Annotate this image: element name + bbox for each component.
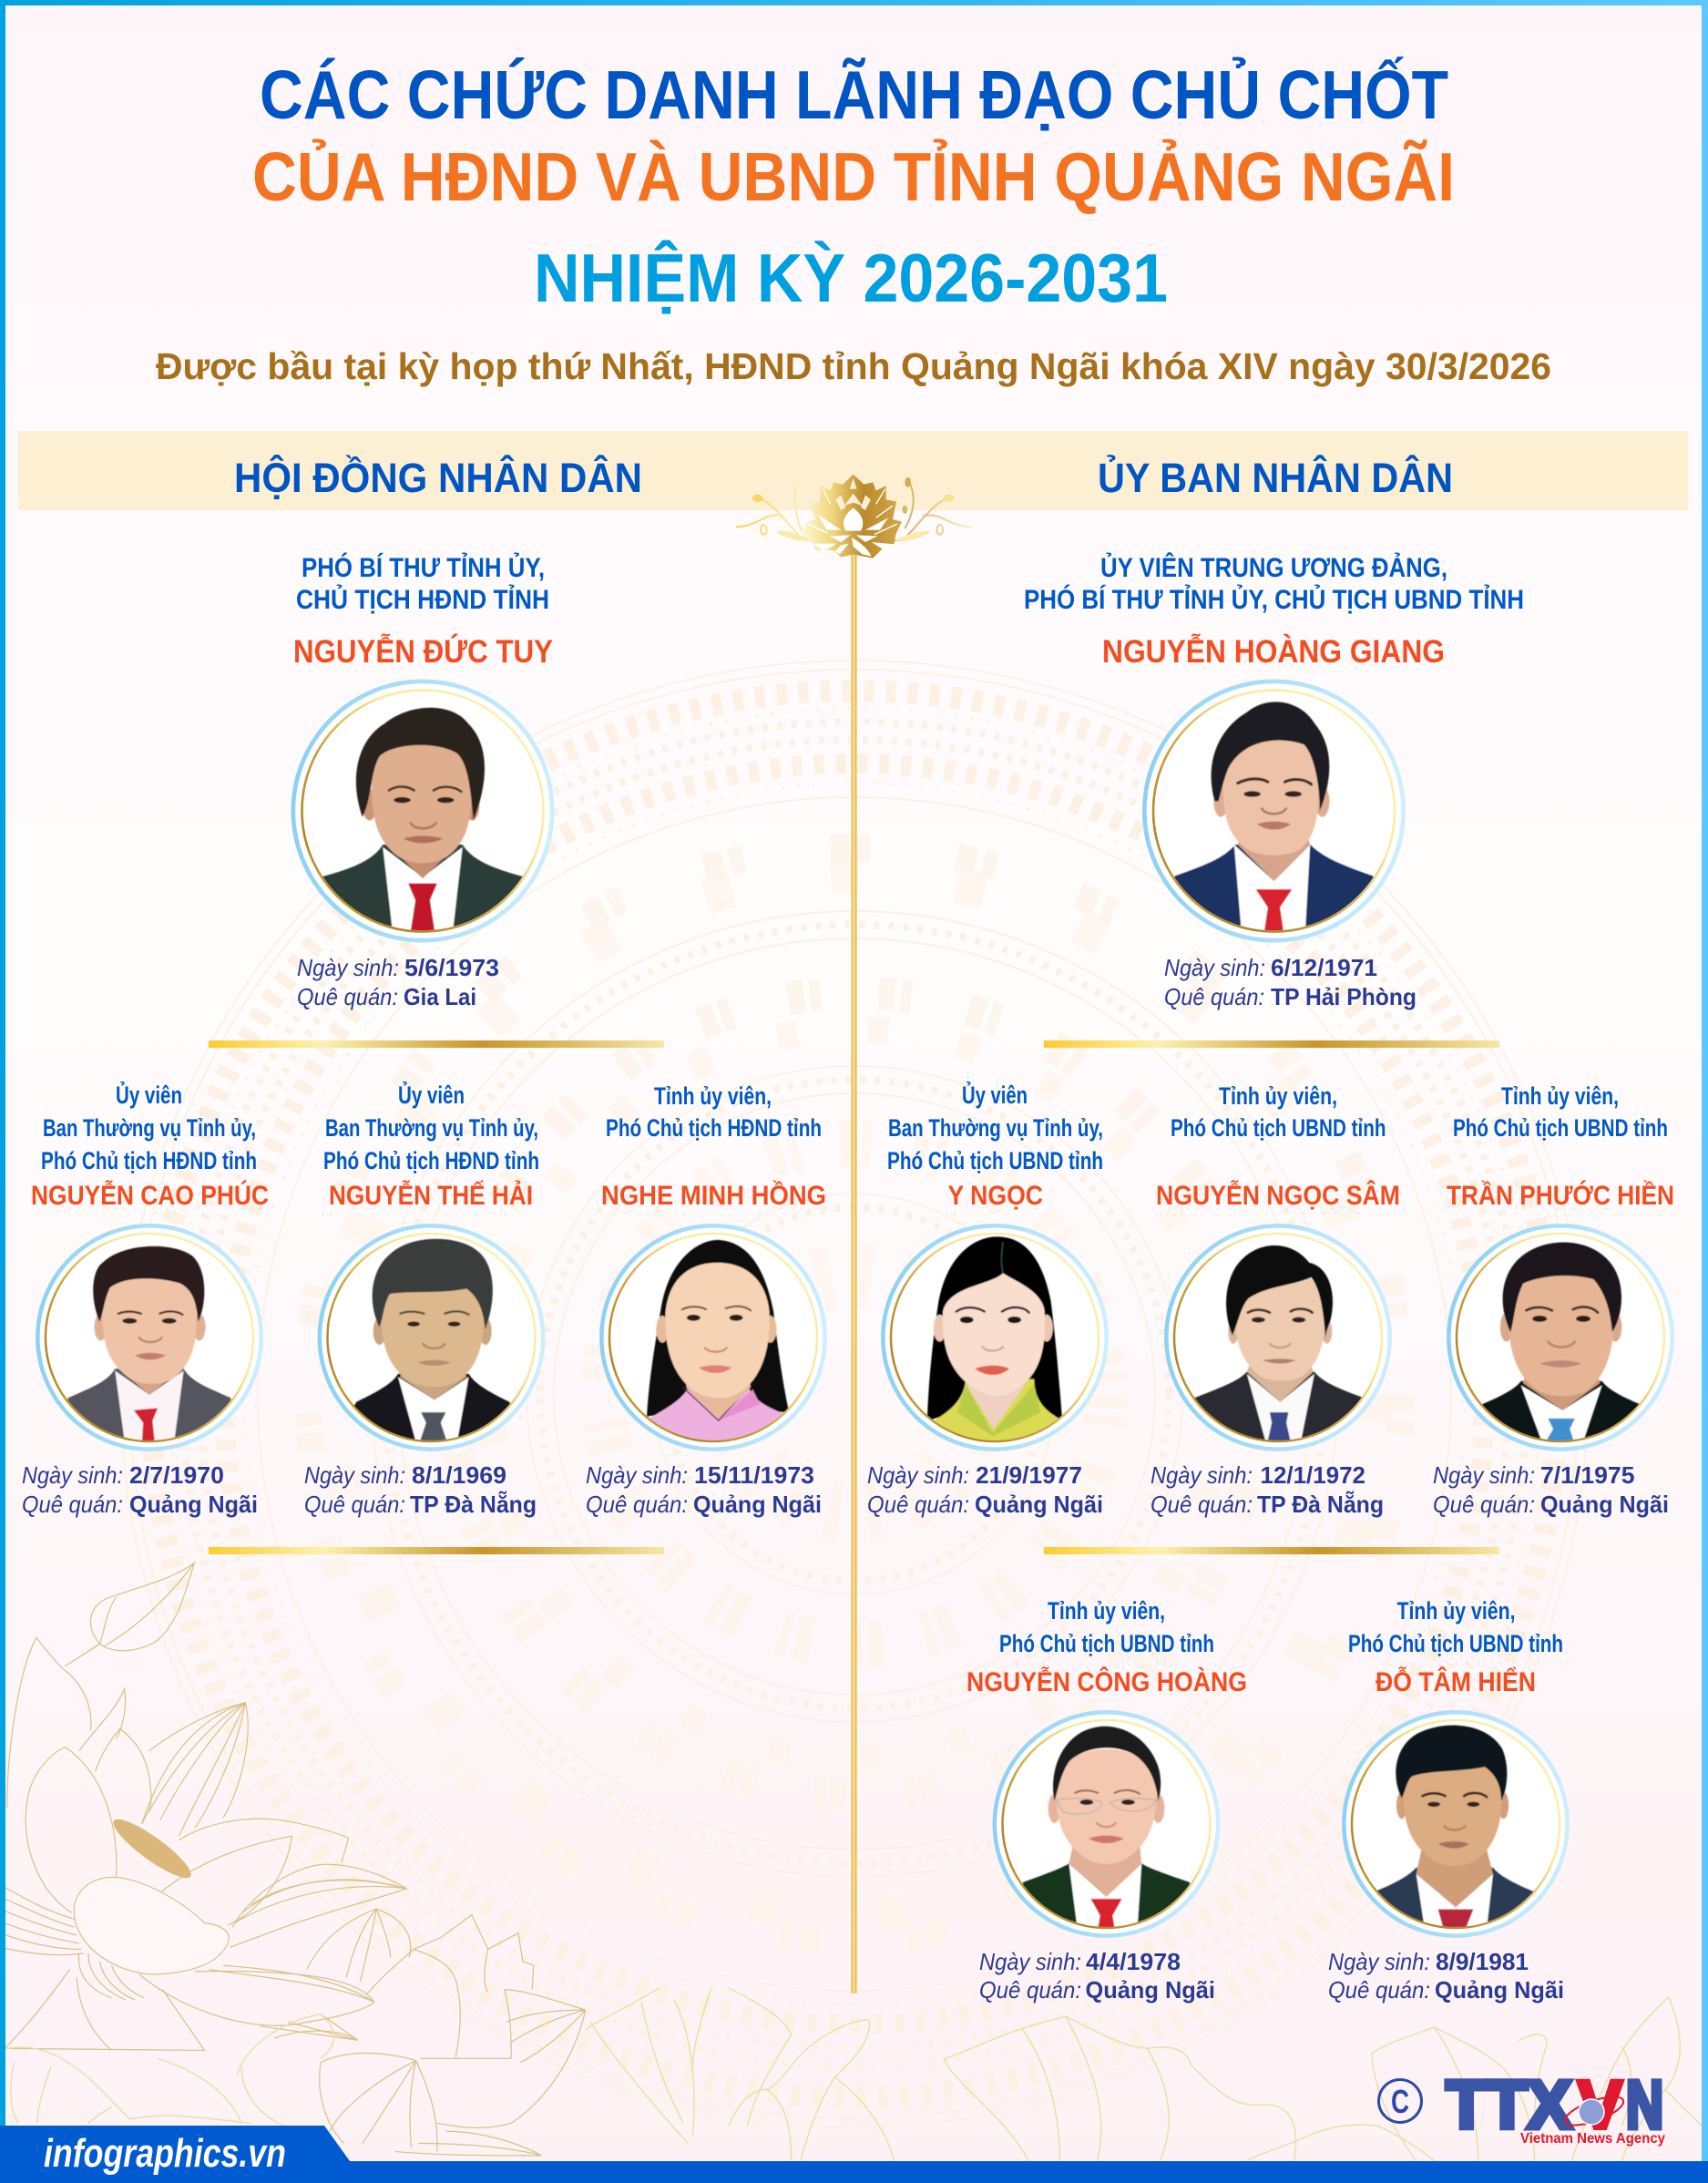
- birth date and hometown: Quê quán:: [1164, 983, 1264, 1010]
- pale lotus line art bottom: [0, 1988, 711, 2144]
- role: Tỉnh ủy viên,: [1501, 1082, 1619, 1110]
- panel: Đỗ Tâm Hiển: [1328, 1597, 1568, 2004]
- icon: copyright: C: [1391, 2083, 1409, 2120]
- role: Phó Chủ tịch UBND tỉnh: [887, 1147, 1103, 1174]
- birth date and hometown: [1151, 1461, 1384, 1518]
- lotus line art bottom left: [0, 1563, 586, 2156]
- role: Ủy viên: [962, 1080, 1028, 1109]
- birth date and hometown: Ngày sinh:: [586, 1461, 688, 1489]
- role: [606, 1082, 822, 1142]
- portrait: [1344, 1712, 1568, 1936]
- role: Tỉnh ủy viên,: [1048, 1597, 1165, 1624]
- role: Phó Chủ tịch UBND tỉnh: [1171, 1114, 1386, 1142]
- logo: TTXVN: TTX: [1447, 2066, 1572, 2143]
- portrait: [320, 1225, 543, 1450]
- role: [1024, 552, 1524, 615]
- birth date and hometown: Quảng Ngãi: [1435, 1976, 1564, 2004]
- birth date and hometown: [979, 1948, 1215, 2004]
- birth date and hometown: Quê quán:: [586, 1491, 688, 1518]
- birth date and hometown: [867, 1461, 1103, 1518]
- birth date and hometown: Ngày sinh:: [1328, 1948, 1430, 1975]
- name: NGUYỄN HOÀNG GIANG: [1102, 633, 1445, 670]
- role: Ban Thường vụ Tỉnh ủy,: [325, 1114, 538, 1142]
- role: Ban Thường vụ Tỉnh ủy,: [43, 1114, 256, 1142]
- panel: Nguyễn Thế Hải: [304, 1080, 543, 1518]
- role: Ủy viên: [116, 1080, 182, 1109]
- bronze drum watermark: [121, 661, 1588, 2127]
- birth date and hometown: [1328, 1948, 1564, 2004]
- lotus seed pod fill: [107, 1811, 197, 1886]
- birth date and hometown: Quê quán:: [867, 1491, 969, 1518]
- logo: TTXVN: [1447, 2066, 1665, 2147]
- footer bar with tab: [0, 2126, 1708, 2183]
- birth date and hometown: 4/4/1978: [1086, 1948, 1181, 1975]
- name: NGUYỄN CÔNG HOÀNG: [967, 1666, 1247, 1697]
- birth date and hometown: 21/9/1977: [976, 1461, 1082, 1489]
- role: PHÓ BÍ THƯ TỈNH ỦY, CHỦ TỊCH UBND TỈNH: [1024, 584, 1524, 615]
- birth date and hometown: 5/6/1973: [404, 954, 499, 981]
- title line 2: CỦA HĐND VÀ UBND TỈNH QUẢNG NGÃI: [252, 138, 1455, 215]
- birth date and hometown: Quê quán:: [1151, 1491, 1253, 1518]
- name: Y NGỌC: [947, 1181, 1043, 1211]
- role: [887, 1080, 1103, 1174]
- portrait: [601, 1225, 825, 1450]
- portrait: [883, 1225, 1107, 1450]
- birth date and hometown: Quảng Ngãi: [693, 1491, 822, 1518]
- role: [1453, 1082, 1668, 1142]
- panel: Nguyễn Ngọc Sâm: [1151, 1082, 1400, 1518]
- role: [41, 1080, 257, 1174]
- icon: copyright: [1379, 2079, 1421, 2123]
- role: [323, 1080, 539, 1174]
- section header band: [18, 431, 1688, 510]
- role: Tỉnh ủy viên,: [1397, 1597, 1516, 1624]
- birth date and hometown: Quảng Ngãi: [1540, 1491, 1669, 1518]
- role: Phó Chủ tịch HĐND tỉnh: [323, 1147, 539, 1174]
- icon: gold lotus: [736, 475, 972, 559]
- role: ỦY VIÊN TRUNG ƯƠNG ĐẢNG,: [1100, 552, 1447, 583]
- birth date and hometown: [304, 1461, 537, 1518]
- birth date and hometown: TP Đà Nẵng: [410, 1491, 537, 1518]
- role: Phó Chủ tịch UBND tỉnh: [999, 1630, 1214, 1657]
- footer site name: infographics.vn: [44, 2131, 286, 2176]
- birth date and hometown: Quê quán:: [297, 983, 398, 1010]
- left border: [0, 0, 5, 2161]
- role: Tỉnh ủy viên,: [654, 1082, 772, 1110]
- subtitle: Được bầu tại kỳ họp thứ Nhất, HĐND tỉnh Quảng Ngãi khóa XIV ngày 30/3/2026: [156, 345, 1551, 387]
- panel: Nguyễn Đức Tuy: [293, 552, 553, 1010]
- portrait: [995, 1712, 1218, 1936]
- role: Tỉnh ủy viên,: [1219, 1082, 1337, 1110]
- role: PHÓ BÍ THƯ TỈNH ỦY,: [302, 552, 545, 583]
- birth date and hometown: Ngày sinh:: [22, 1461, 123, 1489]
- heading: Ủy ban nhân dân: ỦY BAN NHÂN DÂN: [1098, 455, 1453, 501]
- birth date and hometown: Quảng Ngãi: [975, 1491, 1103, 1518]
- gold divider right 1: [1044, 1040, 1499, 1048]
- birth date and hometown: 8/1/1969: [412, 1461, 506, 1489]
- name: ĐỖ TÂM HIỂN: [1376, 1666, 1536, 1697]
- name: NGUYỄN ĐỨC TUY: [293, 633, 553, 670]
- center vertical gold line: [851, 554, 856, 1993]
- top border: [0, 0, 1708, 5]
- birth date and hometown: Ngày sinh:: [297, 954, 399, 981]
- role: Phó Chủ tịch UBND tỉnh: [1348, 1630, 1563, 1657]
- title line 1: CÁC CHỨC DANH LÃNH ĐẠO CHỦ CHỐT: [260, 56, 1448, 133]
- birth date and hometown: Ngày sinh:: [1433, 1461, 1535, 1489]
- logo: TTXVN: V: [1578, 2066, 1622, 2143]
- birth date and hometown: Ngày sinh:: [1164, 954, 1265, 981]
- lotus line art bottom right: [729, 1988, 1708, 2161]
- birth date and hometown: Ngày sinh:: [867, 1461, 969, 1489]
- panel: Nghe Minh Hồng: [586, 1082, 826, 1518]
- heading: Hội đồng nhân dân: HỘI ĐỒNG NHÂN DÂN: [234, 455, 642, 501]
- birth date and hometown: 8/9/1981: [1436, 1948, 1529, 1975]
- panel: Trần Phước Hiền: [1433, 1082, 1674, 1518]
- role: [296, 552, 549, 615]
- birth date and hometown: Ngày sinh:: [979, 1948, 1081, 1975]
- role: CHỦ TỊCH HĐND TỈNH: [296, 584, 549, 615]
- portrait: [1144, 682, 1404, 940]
- portrait: [1166, 1225, 1390, 1450]
- birth date and hometown: 12/1/1972: [1261, 1461, 1365, 1489]
- birth date and hometown: Quê quán:: [304, 1491, 405, 1518]
- role: Phó Chủ tịch HĐND tỉnh: [606, 1114, 822, 1142]
- birth date and hometown: TP Đà Nẵng: [1257, 1491, 1384, 1518]
- birth date and hometown: [22, 1461, 258, 1518]
- birth date and hometown: [297, 954, 499, 1010]
- birth date and hometown: Quê quán:: [979, 1976, 1081, 2004]
- name: TRẦN PHƯỚC HIỀN: [1447, 1180, 1674, 1211]
- role: [1171, 1082, 1386, 1142]
- role: [1348, 1597, 1563, 1657]
- birth date and hometown: Quê quán:: [1328, 1976, 1430, 2004]
- name: NGUYỄN CAO PHÚC: [31, 1180, 269, 1211]
- portrait: [293, 682, 552, 940]
- name: NGUYỄN NGỌC SÂM: [1156, 1180, 1400, 1211]
- birth date and hometown: [586, 1461, 822, 1518]
- birth date and hometown: 7/1/1975: [1540, 1461, 1634, 1489]
- birth date and hometown: Quảng Ngãi: [1086, 1976, 1215, 2004]
- portrait: [37, 1225, 261, 1450]
- portrait: [1448, 1225, 1672, 1450]
- right border: [1702, 0, 1708, 2161]
- role: Ban Thường vụ Tỉnh ủy,: [888, 1114, 1103, 1142]
- birth date and hometown: TP Hải Phòng: [1271, 983, 1417, 1010]
- role: [999, 1597, 1214, 1657]
- gold divider left 2: [209, 1547, 664, 1554]
- role: Ủy viên: [398, 1080, 465, 1109]
- logo: TTXVN: N: [1626, 2066, 1663, 2143]
- panel: Nguyễn Công Hoàng: [967, 1597, 1247, 2004]
- birth date and hometown: Quê quán:: [1433, 1491, 1535, 1518]
- gold divider right 2: [1044, 1547, 1499, 1554]
- birth date and hometown: Quảng Ngãi: [129, 1491, 258, 1518]
- birth date and hometown: 6/12/1971: [1271, 954, 1377, 981]
- panel: Y Ngọc: [867, 1080, 1107, 1518]
- birth date and hometown: [1164, 954, 1417, 1010]
- name: NGUYỄN THẾ HẢI: [329, 1180, 533, 1211]
- role: Phó Chủ tịch HĐND tỉnh: [41, 1147, 257, 1174]
- birth date and hometown: [1433, 1461, 1669, 1518]
- gold divider left 1: [209, 1040, 664, 1048]
- logo: TTXVN: Vietnam News Agency: [1520, 2131, 1665, 2147]
- birth date and hometown: 15/11/1973: [694, 1461, 814, 1489]
- panel: Nguyễn Cao Phúc: [22, 1080, 269, 1518]
- panel: Nguyễn Hoàng Giang: [1024, 552, 1524, 1010]
- name: NGHE MINH HỒNG: [601, 1180, 826, 1211]
- birth date and hometown: Gia Lai: [404, 983, 476, 1010]
- title line 3: NHIỆM KỲ 2026-2031: [534, 240, 1168, 316]
- birth date and hometown: Ngày sinh:: [304, 1461, 405, 1489]
- birth date and hometown: 2/7/1970: [129, 1461, 224, 1489]
- birth date and hometown: Ngày sinh:: [1151, 1461, 1253, 1489]
- birth date and hometown: Quê quán:: [22, 1491, 123, 1518]
